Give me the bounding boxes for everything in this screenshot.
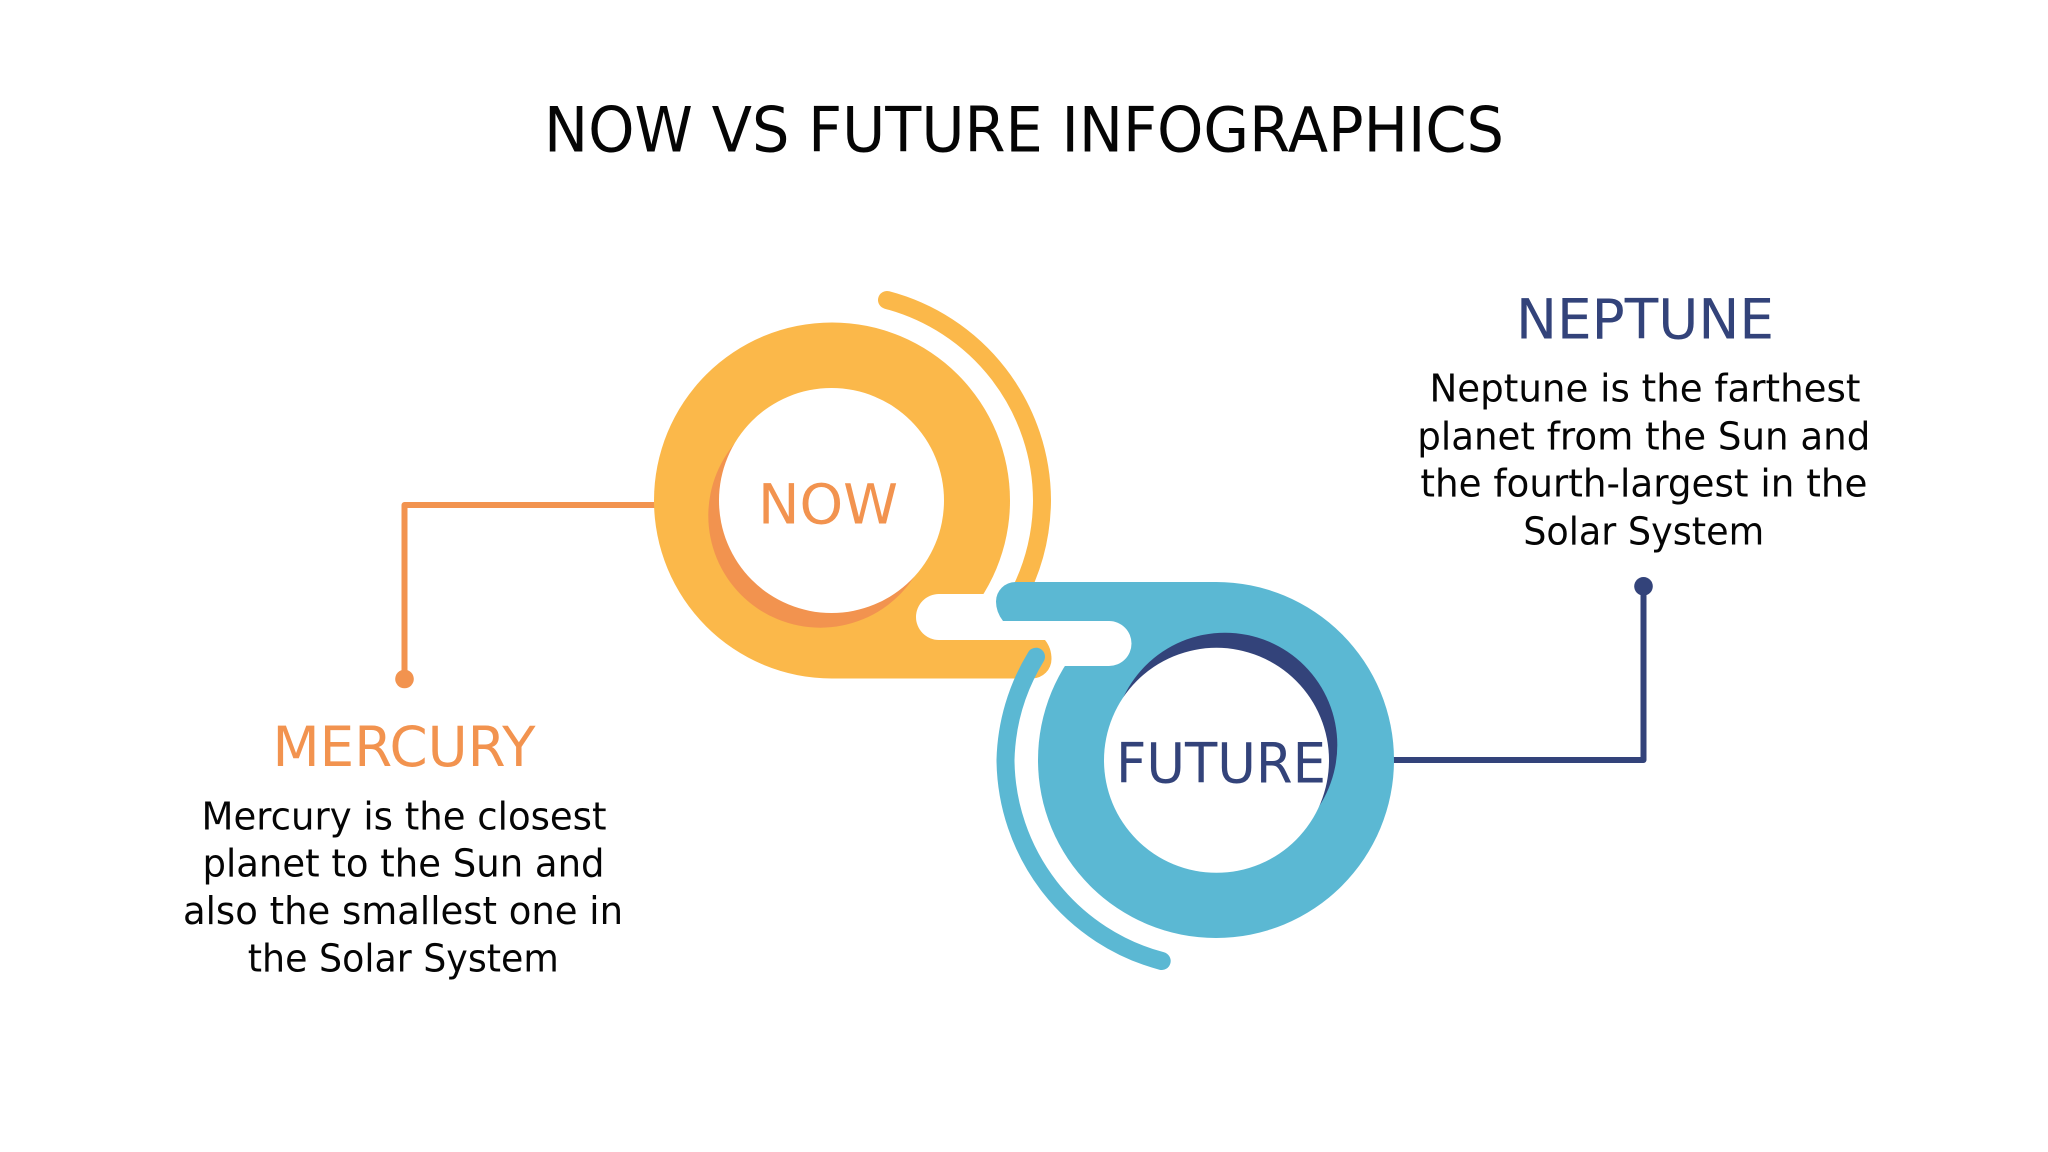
text block: Neptune: [1417, 288, 1870, 553]
Mercury description: also the smallest one in: [183, 889, 623, 933]
blue top bar: [996, 582, 1216, 621]
white notch: [916, 594, 990, 640]
inner white circle: [1104, 648, 1329, 873]
orange tail: [832, 640, 1052, 678]
panel: now ring: [654, 300, 1052, 678]
Mercury description: planet to the Sun and: [202, 842, 604, 886]
panel: now connector line to Mercury: [395, 505, 660, 688]
outer orange arc: [887, 300, 1042, 600]
Neptune heading: NEPTUNE: [1516, 288, 1774, 352]
Mercury description: [183, 794, 623, 981]
white notch in blue: [1060, 621, 1132, 666]
Mercury description: Mercury is the closest: [202, 794, 606, 838]
Neptune description: [1417, 367, 1870, 553]
inner crescent shadow: [708, 404, 932, 628]
future label: FUTURE: [1116, 732, 1326, 797]
outer blue arc: [1006, 657, 1162, 961]
Mercury description: the Solar System: [248, 937, 559, 981]
Neptune description: planet from the Sun and: [1417, 414, 1870, 458]
orange body: [654, 322, 1010, 678]
blue body: [1038, 582, 1394, 938]
panel: future connector line to Neptune: [1388, 577, 1653, 760]
Neptune description: Neptune is the farthest: [1430, 367, 1860, 411]
inner white circle: [719, 388, 944, 613]
panel: future ring: [996, 582, 1394, 961]
Mercury heading: MERCURY: [272, 715, 536, 779]
now label: NOW: [758, 472, 898, 537]
Neptune description: Solar System: [1523, 509, 1764, 553]
title: NOW VS FUTURE INFOGRAPHICS: [544, 94, 1504, 167]
Neptune description: the fourth-largest in the: [1420, 462, 1867, 506]
navy crescent shadow: [1113, 633, 1337, 857]
text block: Mercury: [183, 715, 623, 981]
